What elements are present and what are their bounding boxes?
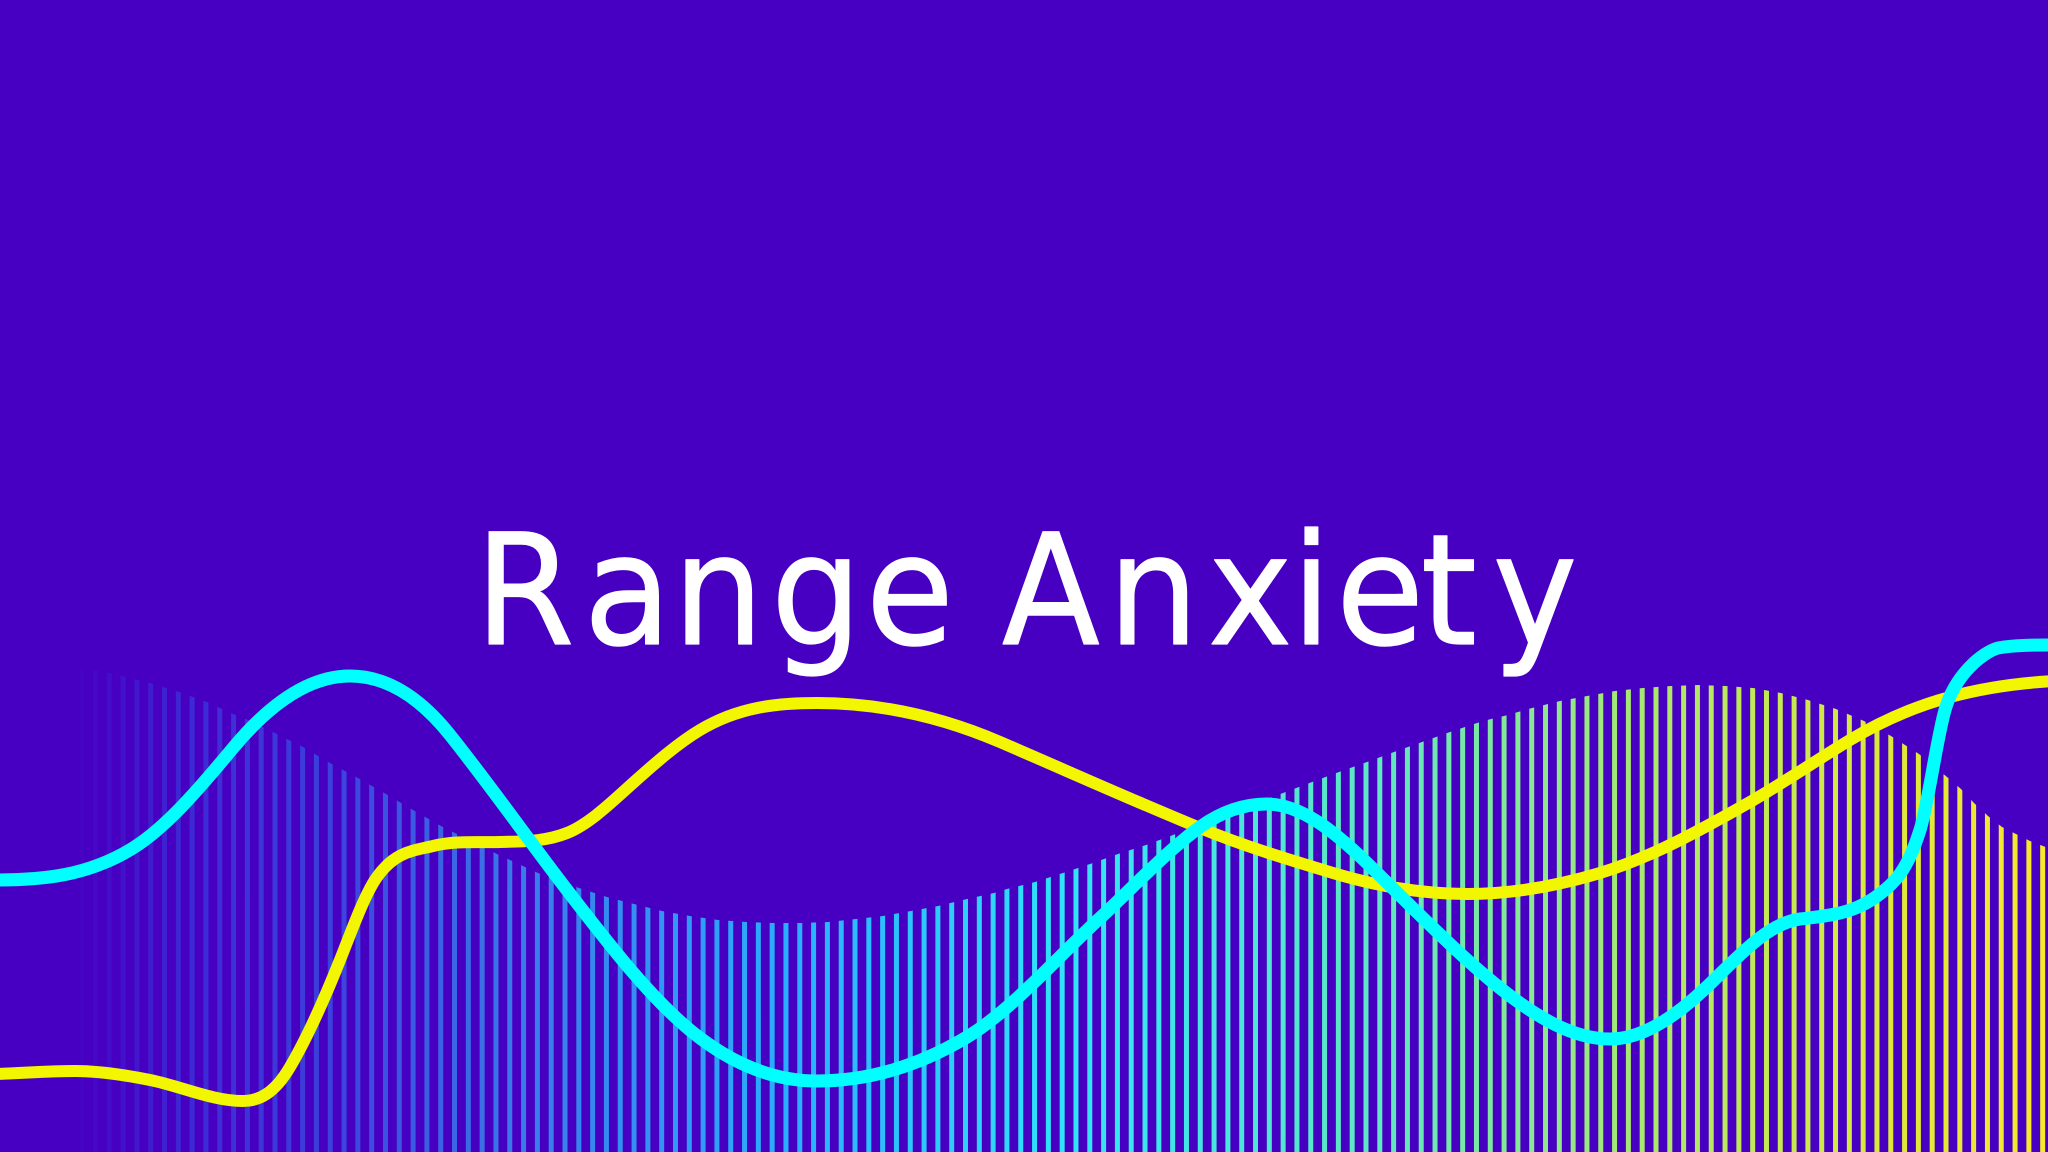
- title: Range Anxiety: [475, 502, 1577, 681]
- cyan line: [0, 645, 2048, 1081]
- yellow line: [0, 681, 2048, 1101]
- striped gradient wave area: [0, 660, 2048, 1152]
